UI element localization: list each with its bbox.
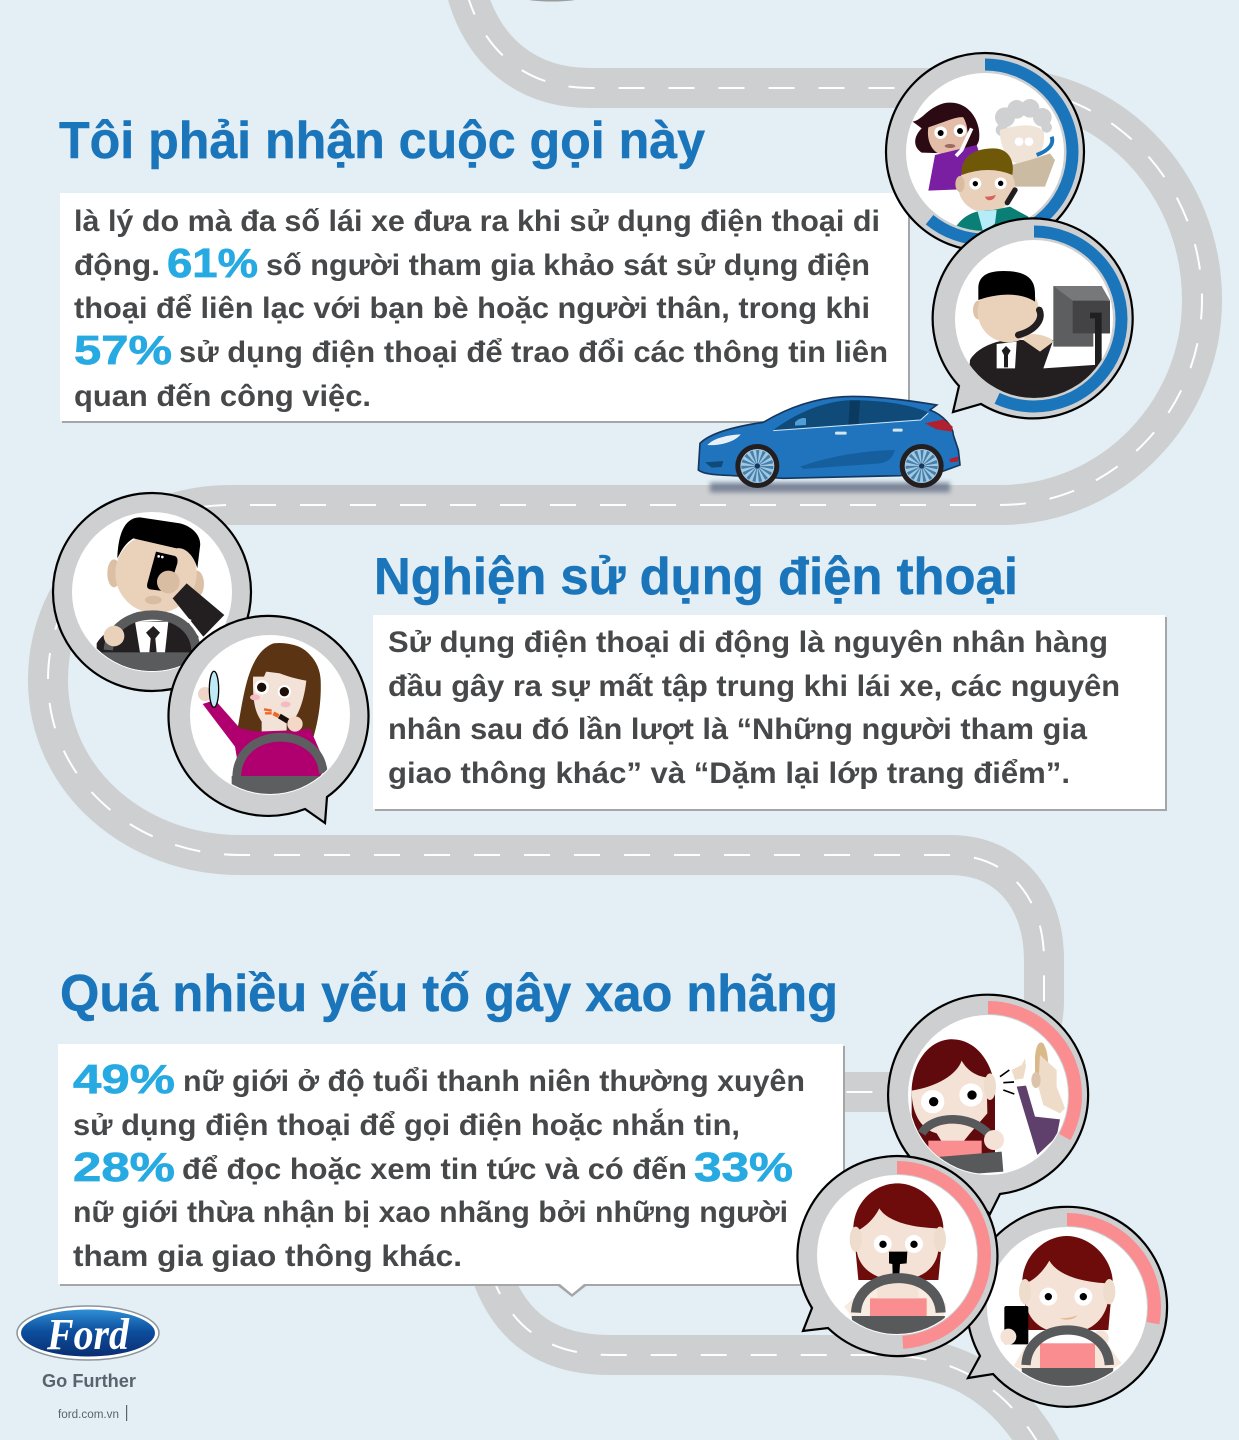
top edge marker [524,0,580,2]
panel: distraction factors: nữ giới ở độ tuổi thanh niên thường xuyên [183,1065,805,1098]
heading: Quá nhiều yếu tố gây xao nhãng: Quá nhiều yếu tố gây xao nhãng [60,965,838,1023]
panel: phone call reasons: 61% [167,240,258,286]
panel: distraction factors: nữ giới thừa nhận bị xao nhãng bởi những người [73,1196,788,1229]
panel: phone call reasons [60,193,910,423]
panel: phone addiction: đầu gây ra sự mất tập trung khi lái xe, các nguyên [388,670,1120,703]
bubble: man driving on the phone [53,493,251,691]
bubble: work phone call 57% [933,218,1133,418]
panel: phone call reasons: là lý do mà đa số lái xe đưa ra khi sử dụng điện thoại di [74,205,880,238]
logo: Ford Go Further: ford.com.vn [58,1409,119,1421]
panel: phone call reasons: số người tham gia khảo sát sử dụng điện [266,249,870,282]
panel: distraction factors: sử dụng điện thoại để gọi điện hoặc nhắn tin, [73,1108,740,1142]
panel: phone addiction: giao thông khác” và “Dặm lại lớp trang điểm”. [388,757,1070,790]
logo: Ford Go Further: Go Further [42,1371,136,1391]
logo: Ford Go Further: Ford [46,1310,130,1359]
panel: phone call reasons: động. [74,249,160,282]
logo: Ford Go Further [17,1306,159,1421]
panel: phone call reasons: 57% [74,327,172,373]
panel: phone call reasons: quan đến công việc. [74,380,371,413]
panel: phone addiction [373,615,1167,811]
bubble: woman talking on phone 49% [797,1156,997,1356]
panel: distraction factors: 49% [73,1056,175,1102]
panel: distraction factors: 33% [694,1144,793,1190]
panel: phone call reasons: sử dụng điện thoại để trao đổi các thông tin liên [179,336,888,369]
panel: distraction factors [58,1044,845,1297]
bubble: calling friends and relatives 61% [886,53,1084,251]
panel: phone addiction: Sử dụng điện thoại di động là nguyên nhân hàng [388,626,1108,659]
panel: distraction factors: 28% [73,1144,175,1190]
panel: phone addiction: nhân sau đó lần lượt là “Những người tham gia [388,713,1087,746]
bubble: woman applying lipstick [168,616,368,823]
heading: Tôi phải nhận cuộc gọi này: Tôi phải nhận cuộc gọi này [59,112,705,170]
icon: blue car [698,396,960,492]
heading: Nghiện sử dụng điện thoại: Nghiện sử dụng điện thoại [374,548,1018,606]
panel: phone call reasons: thoại để liên lạc với bạn bè hoặc người thân, trong khi [74,292,870,325]
bubble: woman distracted by other road user 33% [888,995,1088,1214]
panel: distraction factors: để đọc hoặc xem tin tức và có đến [182,1153,687,1186]
bubble: woman reading phone 28% [967,1207,1167,1407]
panel: distraction factors: tham gia giao thông khác. [73,1240,462,1273]
